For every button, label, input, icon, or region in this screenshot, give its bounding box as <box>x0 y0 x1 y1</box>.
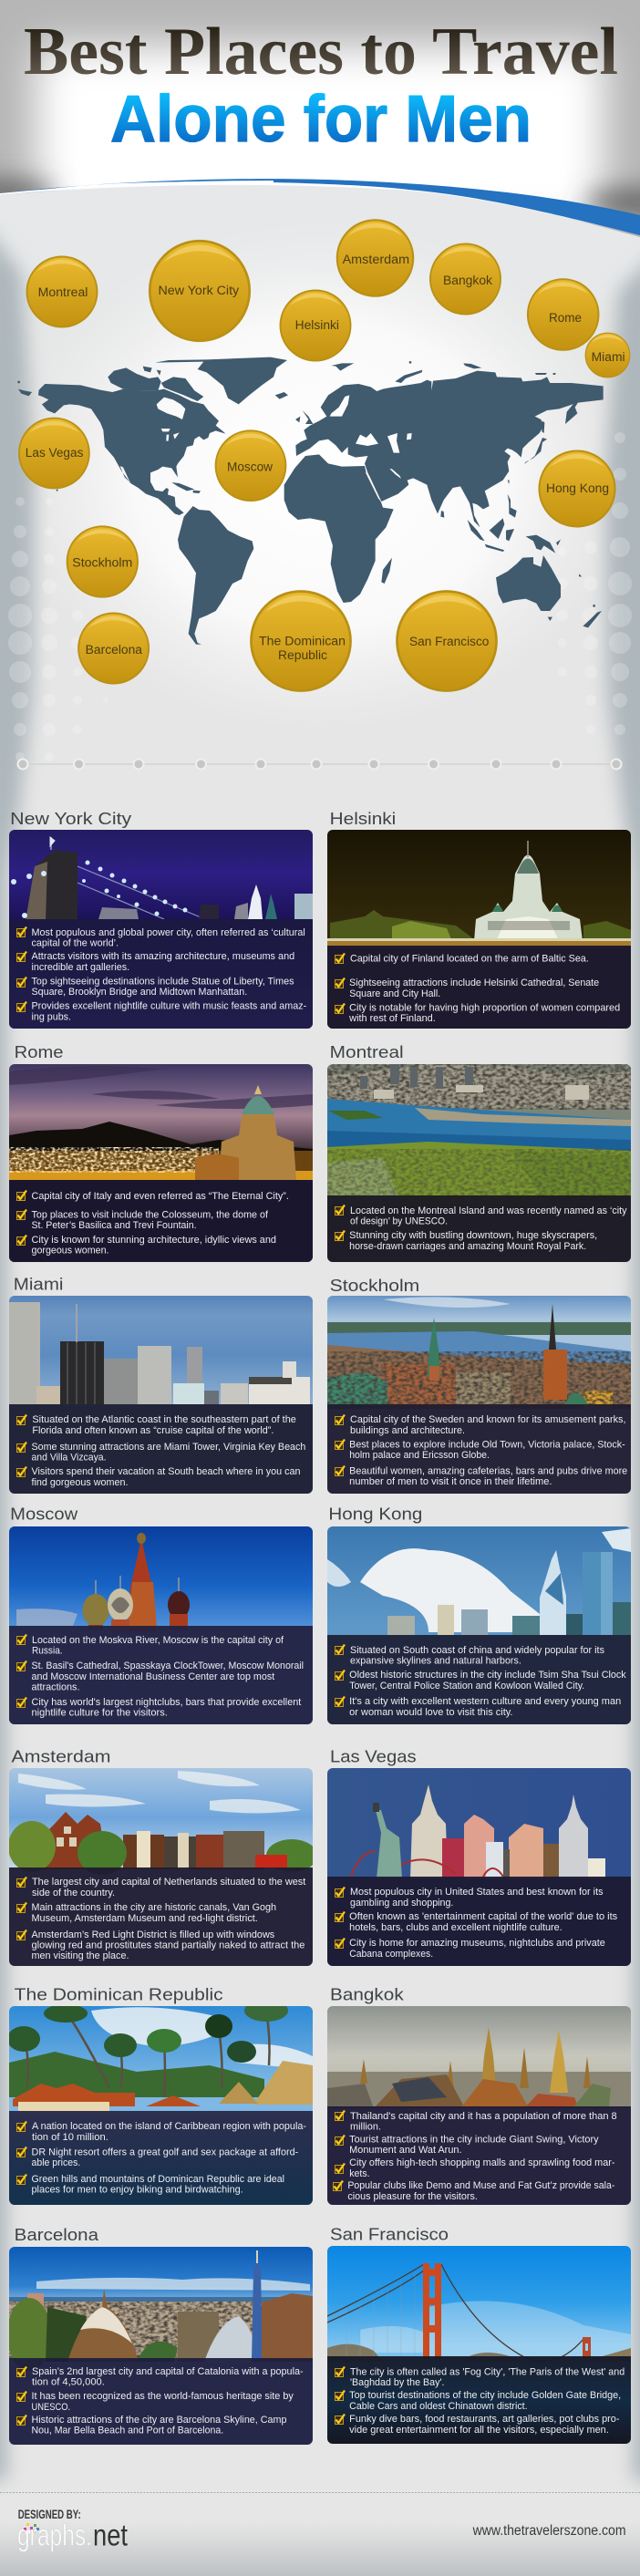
bubble: Rome <box>528 279 598 350</box>
bullet list: Top places to visit include the Colosseum, the dome of <box>31 1209 268 1220</box>
bullet list: incredible art galleries. <box>31 962 129 973</box>
bubble: Las Vegas <box>19 419 89 488</box>
bubble: Hong Kong: Hong Kong <box>546 481 609 495</box>
photo: Brooklyn Bridge at night <box>9 830 313 1029</box>
bubble: Miami: Miami <box>592 350 625 364</box>
bullet list: Florida and often known as “cruise capital of the world”. <box>32 1425 274 1436</box>
bubble: The Dominican Republic: The Dominican <box>259 635 346 647</box>
bullet list <box>16 1877 305 1961</box>
photo: Park Güell <box>7 2247 313 2445</box>
bullet list: tion of 10 million. <box>32 2132 108 2143</box>
heading: New York City <box>10 809 132 828</box>
bullet list <box>335 1414 627 1487</box>
bullet list: ing pubs. <box>31 1012 71 1023</box>
map: Americas <box>17 357 288 645</box>
bullet list: expansive skylines and natural harbors. <box>350 1656 521 1667</box>
panel: Rome <box>9 1042 313 1262</box>
bullet list: and Villa Vizcaya. <box>31 1452 106 1463</box>
bullet list: Museum, Amsterdam Museum and red-light district. <box>31 1913 258 1924</box>
city bubbles <box>19 220 630 691</box>
bullet list: St. Peter’s Basilica and Trevi Fountain. <box>31 1220 197 1231</box>
photo: Grand Palace temples <box>327 2006 631 2205</box>
bullet list: Tower, Central Police Station and Kowloon Walled City. <box>349 1681 584 1691</box>
heading: Moscow <box>10 1505 78 1524</box>
graphs.net logo: net <box>93 2519 128 2552</box>
bullet list: with rest of Finland. <box>348 1013 436 1024</box>
bubble: The Dominican Republic: Republic <box>278 648 327 662</box>
bullet list <box>335 954 620 1024</box>
bubble: Montreal: Montreal <box>38 285 88 299</box>
bullet list <box>16 1634 304 1718</box>
heading: The Dominican Republic <box>15 1984 223 2003</box>
photo: St. Basil's Cathedral <box>9 1526 313 1724</box>
bubble: Helsinki <box>281 290 350 361</box>
bullet list: number of men to visit it once in their lifetime. <box>349 1476 552 1487</box>
bullet list: cious pleasure for the visitors. <box>347 2191 478 2202</box>
bullet list: Some stunning attractions are Miami Tower, Virginia Key Beach <box>31 1442 305 1453</box>
bullet list: of design’ by UNESCO. <box>350 1216 448 1227</box>
bullet list: Beautiful women, amazing cafeterias, bars and pubs drive more <box>349 1466 627 1477</box>
bullet list: gorgeous women. <box>31 1246 108 1257</box>
bullet list: Top tourist destinations of the city include Golden Gate Bridge, <box>349 2390 621 2401</box>
bullet list: Monument and Wat Arun. <box>349 2145 461 2156</box>
bubble: Rome: Rome <box>549 311 582 325</box>
bullet list: It has been recognized as the world-famous heritage site by <box>31 2391 294 2402</box>
heading: Las Vegas <box>330 1746 417 1765</box>
bubble: Hong Kong <box>540 450 614 527</box>
panel: Amsterdam <box>8 1746 317 1966</box>
bullet list: horse-drawn carriages and amazing Mount Royal Park. <box>349 1241 586 1252</box>
title line 1: Best Places to Travel <box>24 15 618 89</box>
bullet list: Capital city of the Sweden and known for its amusement parks, <box>350 1414 625 1425</box>
bullet list: kets. <box>349 2168 370 2179</box>
bullet list: City is home for amazing museums, nightclubs and private <box>349 1938 605 1949</box>
bubble: Las Vegas: Las Vegas <box>26 446 84 460</box>
heading: Helsinki <box>330 809 396 828</box>
bullet list: Spain’s 2nd largest city and capital of Catalonia with a popula- <box>32 2366 304 2377</box>
bullet list: Cable Cars and oldest Chinatown district. <box>349 2401 528 2412</box>
bullet list <box>335 1887 617 1960</box>
bullet list: Located on the Moskva River, Moscow is the capital city of <box>32 1635 284 1646</box>
bubble: Helsinki: Helsinki <box>295 318 339 332</box>
bullet list: Situated on the Atlantic coast in the southeastern part of the <box>32 1414 296 1425</box>
bullet list: Historic attractions of the city are Barcelona Skyline, Camp <box>31 2415 287 2426</box>
bullet list: million. <box>350 2121 381 2132</box>
bullet list: Russia. <box>32 1645 63 1656</box>
bullet list: Cabana complexes. <box>349 1949 433 1960</box>
bullet list <box>335 1645 626 1718</box>
bullet list: The city is often called as 'Fog City', 'The Paris of the West' and <box>350 2367 625 2378</box>
bullet list: holm palace and Ericsson Globe. <box>349 1450 490 1461</box>
bullet list: Popular clubs like Demo and Muse and Fat Gut’z provide sala- <box>347 2180 615 2191</box>
bullet list: Located on the Montreal Island and was recently named as ‘city <box>350 1205 627 1216</box>
bullet list: capital of the world’. <box>31 937 119 948</box>
bullet list: The largest city and capital of Netherlands situated to the west <box>32 1877 305 1888</box>
bullet list: nightlife culture for the visitors. <box>31 1707 168 1718</box>
panel: Montreal <box>327 1042 631 1262</box>
photo: Miami skyline <box>9 1296 313 1494</box>
bullet list: Capital city of Finland located on the arm of Baltic Sea. <box>350 954 589 965</box>
footer shading <box>0 2521 640 2576</box>
page background <box>0 0 640 237</box>
photo: Stockholm old town <box>327 1296 631 1494</box>
bubble: Moscow <box>216 430 285 501</box>
bullet list: Square, Brooklyn Bridge and Midtown Manhattan. <box>31 987 247 998</box>
bullet list: glowing red and prostitutes stand partially naked to attract the <box>31 1940 305 1951</box>
panel: Stockholm <box>327 1276 631 1494</box>
bullet list: side of the country. <box>32 1888 115 1898</box>
bullet list: Amsterdam’s Red Light District is filled up with windows <box>31 1929 274 1940</box>
bubble: New York City <box>150 241 250 341</box>
bullet list: Visitors spend their vacation at South beach where in you can <box>31 1466 301 1477</box>
bullet list <box>16 1414 305 1488</box>
bullet list: gambling and shopping. <box>350 1898 453 1909</box>
photo: Golden Gate Bridge <box>327 2246 631 2444</box>
bullet list: Funky dive bars, food restaurants, art galleries, pot clubs pro- <box>349 2414 620 2425</box>
panel: Bangkok <box>327 1984 631 2205</box>
bullet list: City is known for stunning architecture, idyllic views and <box>31 1235 276 1246</box>
bullet list <box>16 2366 304 2436</box>
panel: Helsinki <box>327 809 631 1029</box>
bullet list: find gorgeous women. <box>31 1477 128 1488</box>
bubble: Montreal <box>27 257 97 326</box>
bullet list: tion of 4,50,000. <box>32 2376 105 2387</box>
photo: St. Peter's Basilica at dusk <box>9 1064 313 1262</box>
bullet list: Nou, Mar Bella Beach and Port of Barcelona. <box>31 2426 223 2436</box>
bullet list: DR Night resort offers a great golf and sex package at afford- <box>31 2147 299 2157</box>
panel: Hong Kong <box>327 1505 631 1724</box>
footer: website URL: www.thetravelerszone.com <box>472 2523 626 2539</box>
bullet list: vide great entertainment for all the visitors, especially men. <box>349 2425 609 2436</box>
photo: Hong Kong skyline <box>327 1526 631 1724</box>
bullet list: buildings and architecture. <box>350 1425 465 1436</box>
bullet list: St. Basil's Cathedral, Spasskaya ClockTower, Moscow Monorail <box>31 1660 304 1671</box>
heading: San Francisco <box>330 2224 449 2243</box>
bullet list: City has world's largest nightclubs, bars that provide excellent <box>31 1697 301 1708</box>
designed by label: DESIGNED BY: <box>18 2507 81 2521</box>
heading: Hong Kong <box>328 1505 422 1524</box>
panel: Miami <box>9 1274 313 1494</box>
bullet list: Situated on South coast of china and widely popular for its <box>350 1645 604 1656</box>
bubble: Bangkok: Bangkok <box>443 274 492 287</box>
bullet list: places for men to enjoy biking and birdwatching. <box>31 2185 243 2196</box>
bubble: Miami <box>585 333 630 378</box>
photo: Helsinki Cathedral at night <box>327 830 631 1029</box>
title <box>24 15 618 156</box>
bullet list: City is notable for having high proportion of women compared <box>349 1003 620 1014</box>
bubble: San Francisco: San Francisco <box>409 635 489 648</box>
panel: Las Vegas <box>327 1746 631 1966</box>
bullet list <box>334 2110 617 2202</box>
bullet list: Best places to explore include Old Town, Victoria palace, Stock- <box>349 1439 625 1450</box>
photo: Amsterdam canal houses <box>8 1768 317 1966</box>
bullet list: Attracts visitors with its amazing architecture, museums and <box>31 951 294 962</box>
bubble: Barcelona: Barcelona <box>86 643 142 657</box>
bubble: San Francisco <box>397 591 496 691</box>
bubble: Amsterdam: Amsterdam <box>343 253 409 266</box>
bullet list: 'Baghdad by the Bay'. <box>350 2377 445 2388</box>
title line 2: Alone for Men <box>110 83 532 156</box>
bubble: Amsterdam <box>337 220 413 296</box>
bullet list <box>335 2367 625 2436</box>
graphs.net logo: graphs. <box>17 2519 92 2552</box>
bullet list <box>335 1205 627 1252</box>
bullet list: It's a city with excellent western culture and every young man <box>349 1696 621 1707</box>
panel: Moscow <box>9 1505 313 1724</box>
panel: San Francisco <box>327 2224 631 2444</box>
timeline connector <box>18 759 622 770</box>
bullet list <box>16 926 307 1023</box>
photo: Montreal aerial view <box>327 1064 631 1262</box>
bullet list: Stunning city with bustling downtown, huge skyscrapers, <box>349 1230 597 1241</box>
bullet list: Sightseeing attractions include Helsinki Cathedral, Senate <box>349 978 599 988</box>
bullet list: men visiting the place. <box>31 1950 129 1961</box>
bubble: New York City: New York City <box>159 284 239 297</box>
bullet list: hotels, bars, clubs and excellent nightlife culture. <box>349 1922 563 1933</box>
bullet list <box>16 2121 306 2196</box>
heading: Stockholm <box>330 1276 419 1295</box>
bullet list: UNESCO. <box>31 2402 70 2413</box>
heading: Montreal <box>330 1042 404 1061</box>
bullet list: Often known as 'entertainment capital of the world' due to its <box>349 1911 617 1922</box>
bullet list: able prices. <box>31 2157 80 2168</box>
bullet list: Tourist attractions in the city include Giant Swing, Victory <box>349 2134 599 2145</box>
panel: The Dominican Republic <box>7 1984 313 2205</box>
bullet list: Oldest historic structures in the city include Tsim Sha Tsui Clock <box>349 1670 626 1681</box>
bullet list: City offers high-tech shopping malls and sprawling food mar- <box>349 2157 615 2168</box>
panel: New York City <box>9 809 313 1029</box>
icon: coloured pixels logo <box>24 2523 39 2533</box>
bullet list: Top sightseeing destinations include Statue of Liberty, Times <box>31 976 294 987</box>
bullet list: Most populous and global power city, often referred as ‘cultural <box>31 927 305 938</box>
heading: Bangkok <box>330 1984 405 2003</box>
bubble: Barcelona <box>78 613 149 684</box>
world map <box>17 357 604 645</box>
bullet list: Square and City Hall. <box>349 988 440 999</box>
bullet list: and Moscow International Business Center are top most <box>31 1671 274 1682</box>
bullet list: Capital city of Italy and even referred as “The Eternal City”. <box>31 1191 289 1202</box>
bubble: Stockholm <box>67 526 138 597</box>
bullet list: Thailand's capital city and it has a population of more than 8 <box>350 2111 617 2122</box>
bubble: Moscow: Moscow <box>227 460 273 474</box>
heading: Amsterdam <box>11 1746 110 1765</box>
bullet list: or woman would love to visit this city. <box>349 1707 512 1718</box>
bubble: The Dominican Republic <box>252 591 350 691</box>
photo: tropical beach resort <box>7 2000 313 2205</box>
footer: designer credit <box>17 2507 128 2552</box>
decorative dots <box>8 432 632 761</box>
bullet list: A nation located on the island of Caribbean region with popula- <box>32 2121 306 2132</box>
bullet list: Most populous city in United States and best known for its <box>350 1887 604 1898</box>
heading: Barcelona <box>15 2225 99 2244</box>
bullet list <box>16 1191 289 1257</box>
bullet list: Main attractions in the city are historic canals, Van Gogh <box>31 1902 276 1913</box>
panel: Barcelona <box>7 2225 313 2445</box>
bullet list: attractions. <box>31 1681 80 1692</box>
map: Eurasia, Africa, Australia <box>284 361 604 627</box>
bullet list: Green hills and mountains of Dominican Republic are ideal <box>31 2174 284 2185</box>
heading: Miami <box>14 1274 64 1293</box>
bubble: Bangkok <box>430 244 501 314</box>
bubble: Stockholm: Stockholm <box>72 556 132 569</box>
footer divider <box>0 2491 640 2493</box>
bullet list: Provides excellent nightlife culture with music feasts and amaz- <box>31 1001 307 1012</box>
heading: Rome <box>15 1042 63 1061</box>
photo: New York-New York casino <box>327 1768 631 1966</box>
